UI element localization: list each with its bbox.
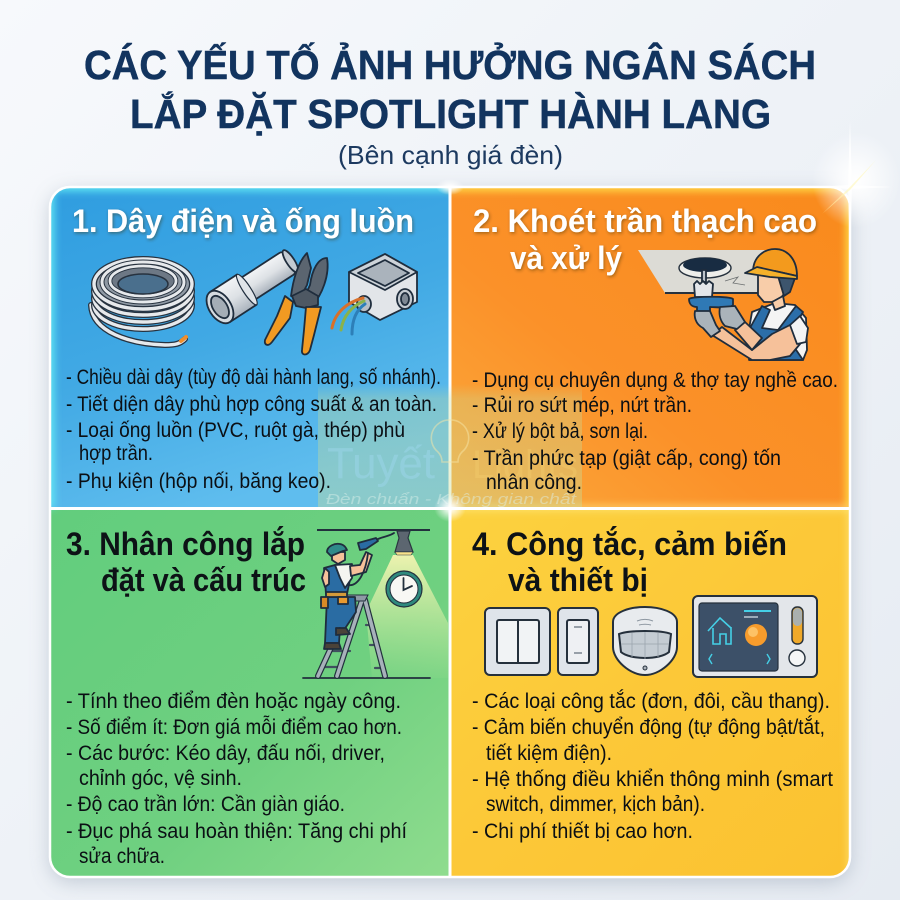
- body text 2: [472, 369, 838, 494]
- body text 4: tiết kiệm điện).: [486, 742, 612, 765]
- heading 3: 3. Nhân công lắp: [66, 525, 305, 562]
- body text 4: - Hệ thống điều khiển thông minh (smart: [472, 768, 833, 791]
- body text 1: - Loại ống luồn (PVC, ruột gà, thép) phù: [66, 419, 405, 442]
- icon: cable coil: [91, 259, 192, 345]
- body text 1: hợp trần.: [79, 442, 153, 465]
- heading 3: [66, 525, 306, 598]
- title: [84, 42, 816, 137]
- title: LẮP ĐẶT SPOTLIGHT HÀNH LANG: [130, 91, 771, 137]
- panel 3: labour: [66, 525, 448, 868]
- heading 2: 2. Khoét trần thạch cao: [473, 203, 817, 239]
- panel 1: wiring and conduit: [66, 203, 441, 493]
- watermark: [318, 384, 582, 508]
- title: CÁC YẾU TỐ ẢNH HƯỞNG NGÂN SÁCH: [84, 42, 816, 88]
- body text 3: chỉnh góc, vệ sinh.: [79, 767, 242, 790]
- heading 4: [472, 525, 787, 598]
- icon: light cone: [366, 555, 448, 678]
- body text 4: - Cảm biến chuyển động (tự động bật/tắt,: [472, 716, 825, 739]
- icon: double switch: [485, 608, 550, 675]
- body text 1: - Chiều dài dây (tùy độ dài hành lang, số nhánh).: [66, 366, 441, 389]
- icon: single switch: [558, 608, 598, 675]
- body text 4: - Các loại công tắc (đơn, đôi, cầu thang).: [472, 690, 830, 713]
- body text 2: nhân công.: [486, 471, 582, 494]
- heading 4: và thiết bị: [508, 562, 648, 598]
- watermark: Tuyết: [327, 439, 435, 488]
- icon: ceiling panel: [638, 250, 768, 293]
- body text 3: - Đục phá sau hoàn thiện: Tăng chi phí: [66, 820, 407, 843]
- body text 3: sửa chữa.: [79, 845, 165, 868]
- panel shadow: [50, 192, 850, 882]
- heading 4: 4. Công tắc, cảm biến: [472, 525, 787, 562]
- icon: pliers: [265, 253, 328, 354]
- heading 3: đặt và cấu trúc: [101, 562, 306, 598]
- lens glare: [434, 120, 900, 522]
- body text 1: [66, 366, 441, 493]
- body text 3: - Số điểm ít: Đơn giá mỗi điểm cao hơn.: [66, 716, 402, 739]
- icon: ceiling and lamp: [317, 530, 430, 555]
- heading 2: và xử lý: [510, 240, 622, 276]
- body text 3: [66, 690, 407, 868]
- icon: junction box: [332, 254, 417, 334]
- icon: ladder: [303, 595, 430, 678]
- watermark: Đèn chuẩn - Không gian chất: [326, 491, 577, 508]
- body text 1: - Phụ kiện (hộp nối, băng keo).: [66, 470, 331, 493]
- panel backgrounds: [50, 187, 850, 877]
- body text 3: - Các bước: Kéo dây, đấu nối, driver,: [66, 742, 385, 765]
- body text 3: - Độ cao trần lớn: Cần giàn giáo.: [66, 793, 345, 816]
- body text 4: [472, 690, 833, 843]
- body text 3: - Tính theo điểm đèn hoặc ngày công.: [66, 690, 401, 713]
- body text 2: - Dụng cụ chuyên dụng & thợ tay nghề cao.: [472, 369, 838, 392]
- body text 2: - Xử lý bột bả, sơn lại.: [472, 420, 648, 443]
- watermark: Lights: [472, 443, 578, 487]
- panel 2: ceiling cut-out: [472, 203, 838, 494]
- icon: worker on ladder: [321, 533, 394, 649]
- icon: clock: [386, 571, 422, 607]
- icon: worker with drill: [689, 249, 808, 360]
- body text 2: - Trần phức tạp (giật cấp, cong) tốn: [472, 447, 781, 470]
- subtitle: (Bên cạnh giá đèn): [338, 140, 563, 170]
- body text 2: - Rủi ro sứt mép, nứt trần.: [472, 394, 692, 417]
- body text 4: - Chi phí thiết bị cao hơn.: [472, 820, 693, 843]
- icon: smart control panel: [693, 596, 817, 677]
- heading 2: [473, 203, 817, 276]
- icon: motion sensor: [613, 607, 677, 675]
- icon: conduit pipe: [201, 244, 304, 328]
- body text 4: switch, dimmer, kịch bản).: [486, 793, 705, 816]
- heading 1: 1. Dây điện và ống luồn: [72, 203, 414, 239]
- body text 1: - Tiết diện dây phù hợp công suất & an toàn.: [66, 393, 437, 416]
- panel 4: switches and sensors: [472, 525, 833, 843]
